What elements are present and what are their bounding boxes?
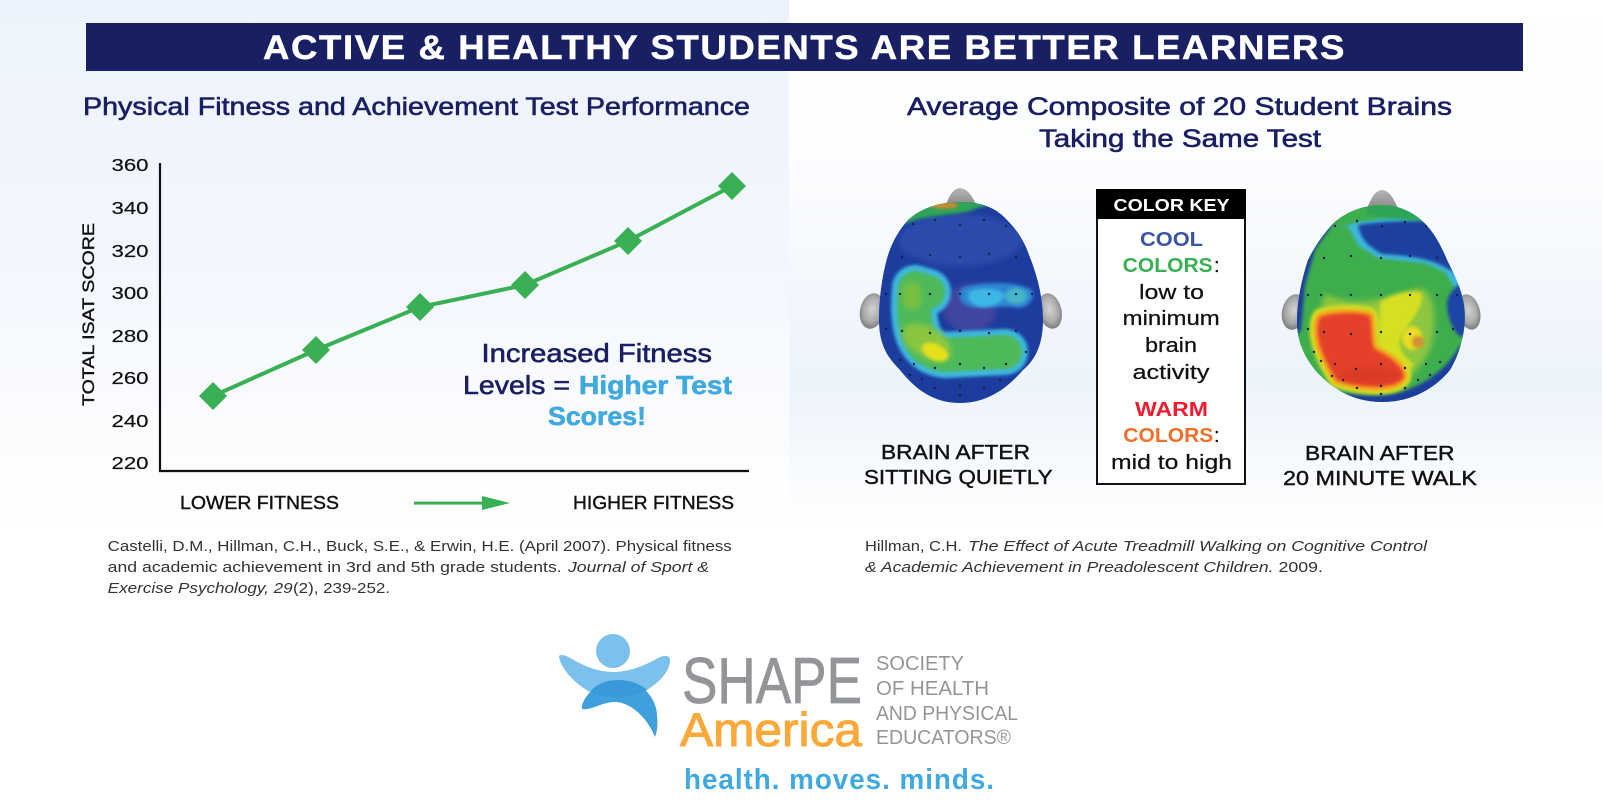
y axis tick labels: 320 (112, 241, 149, 261)
heading: brain comparison (907, 93, 1452, 153)
caption: 20 minute walk (1283, 443, 1478, 490)
arrow (414, 496, 510, 510)
citation: fitness study: (2), 239-252. (293, 580, 390, 597)
x axis label: higher fitness: HIGHER FITNESS (573, 493, 734, 513)
chart callout: Higher Test (579, 370, 732, 400)
brain after sitting quietly (857, 188, 1066, 408)
tagline: health. moves. minds. (684, 764, 995, 796)
background: left panel tint (0, 0, 789, 530)
y axis tick labels: 300 (112, 283, 149, 303)
citation: fitness study: Castelli, D.M., Hillman, C.H., Buck, S.E., & Erwin, H.E. (April 2007). Physical fitness (108, 538, 732, 555)
chart callout: Scores! (548, 401, 646, 431)
color key panel: COLOR KEY (1114, 195, 1230, 215)
heading: line chart: Physical Fitness and Achievement Test Performance (83, 93, 750, 121)
chart axes (160, 163, 749, 471)
warm colors: COLORS (1123, 425, 1213, 447)
y axis tick labels: 360 (112, 155, 149, 175)
citation: brain study: 2009. (1278, 559, 1323, 576)
brain after 20 minute walk (1279, 190, 1484, 410)
citation: fitness study: and academic achievement in 3rd and 5th grade students. (108, 559, 562, 576)
caption: sitting quietly: SITTING QUIETLY (864, 467, 1052, 489)
cool colors: minimum (1123, 308, 1220, 330)
caption: 20 minute walk: 20 MINUTE WALK (1283, 468, 1478, 490)
head heat map (875, 196, 1047, 408)
cool colors: activity (1132, 362, 1210, 384)
citation: fitness study (108, 538, 732, 597)
y axis tick labels (112, 155, 149, 473)
warm colors: mid to high (1111, 452, 1232, 474)
organization name: SOCIETY (876, 653, 964, 675)
data line (213, 186, 732, 396)
cool colors: : (1214, 255, 1220, 277)
line chart (79, 155, 749, 513)
y axis tick labels: 260 (112, 368, 149, 388)
y axis tick labels: 240 (112, 411, 149, 431)
citation: brain study: Hillman, C.H. (865, 538, 962, 555)
title banner: ACTIVE & HEALTHY STUDENTS ARE BETTER LEARNERS (263, 29, 1346, 67)
x axis label: lower fitness: LOWER FITNESS (180, 493, 339, 513)
background: right panel tint (789, 0, 1602, 530)
SHAPE America logo (559, 634, 1018, 796)
chart callout (463, 338, 732, 431)
heading: brain comparison: Average Composite of 20 Student Brains (907, 93, 1452, 121)
cool colors: COLORS (1123, 255, 1213, 277)
ears (1279, 292, 1484, 332)
warm colors: : (1214, 425, 1220, 447)
icon: figure (559, 634, 670, 737)
wordmark: SHAPE (682, 644, 862, 717)
nose (945, 188, 977, 206)
caption: 20 minute walk: BRAIN AFTER (1305, 443, 1454, 465)
cool colors: low to (1139, 282, 1204, 304)
ears (857, 291, 1066, 331)
organization name (876, 653, 1018, 749)
chart callout: Increased Fitness (482, 338, 712, 368)
citation: brain study (865, 538, 1428, 576)
warm colors: WARM (1135, 399, 1208, 421)
y axis tick labels: 340 (112, 198, 149, 218)
warm colors (1111, 399, 1232, 474)
electrode dots (1308, 221, 1457, 394)
data markers (199, 172, 746, 410)
electrode dots (886, 220, 1032, 395)
organization name: AND PHYSICAL (876, 703, 1018, 725)
caption: sitting quietly (864, 442, 1052, 489)
heading: brain comparison: Taking the Same Test (1039, 125, 1321, 153)
cool colors (1123, 229, 1220, 384)
citation: fitness study: Journal of Sport & (567, 559, 709, 576)
caption: sitting quietly: BRAIN AFTER (881, 442, 1030, 464)
nose (1367, 190, 1398, 208)
key header (1096, 189, 1246, 219)
citation: fitness study: Exercise Psychology, 29 (108, 580, 293, 597)
head heat map (1297, 205, 1465, 402)
citation: brain study: & Academic Achievement in Preadolescent Children. (865, 559, 1274, 576)
title banner (86, 23, 1523, 71)
organization name: OF HEALTH (876, 678, 989, 700)
SHAPE America logo: America (680, 703, 863, 756)
citation: brain study: The Effect of Acute Treadmill Walking on Cognitive Control (968, 538, 1428, 555)
y axis title: TOTAL ISAT SCORE (79, 223, 98, 406)
y axis tick labels: 280 (112, 326, 149, 346)
color key panel (1096, 189, 1246, 484)
cool colors: COOL (1140, 229, 1203, 251)
y axis tick labels: 220 (112, 453, 149, 473)
chart callout: Levels = (463, 370, 570, 400)
cool colors: brain (1145, 335, 1197, 357)
organization name: EDUCATORS® (876, 727, 1011, 749)
